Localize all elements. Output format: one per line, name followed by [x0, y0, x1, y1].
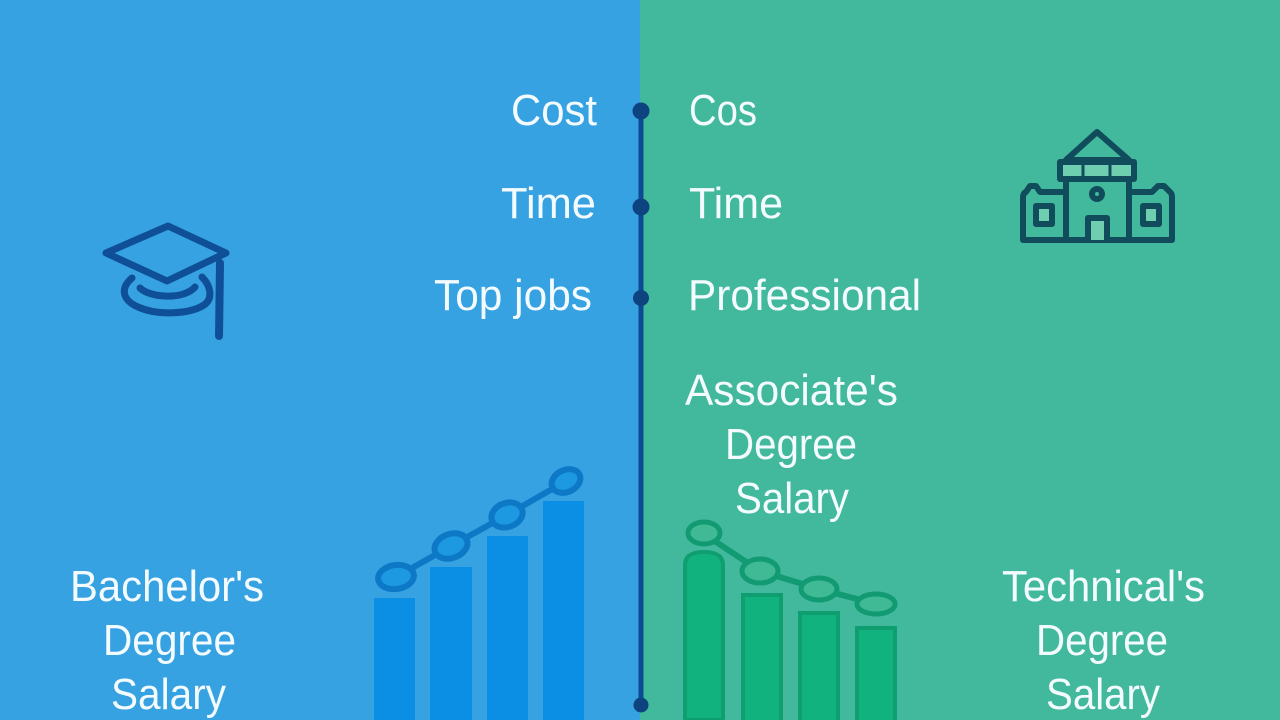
- labels: associate's comparison rows: [688, 86, 921, 320]
- icon: graduation cap: [106, 226, 226, 336]
- heading: technical's degree salary: Salary: [1046, 670, 1160, 719]
- icon: school building: [1023, 132, 1172, 240]
- heading: associate's degree salary: [685, 366, 898, 523]
- heading: associate's degree salary: Salary: [735, 474, 849, 523]
- chart: rising bachelor's salary bars: [374, 465, 584, 720]
- labels: associate's comparison rows: Professional: [688, 271, 921, 320]
- labels: bachelor's comparison rows: [434, 86, 597, 320]
- panel: bachelor's degree background: [0, 0, 640, 720]
- labels: associate's comparison rows: Time: [689, 179, 783, 228]
- heading: bachelor's degree salary: [70, 562, 264, 719]
- heading: bachelor's degree salary: Salary: [111, 670, 226, 719]
- heading: technical's degree salary: [1002, 562, 1205, 719]
- labels: bachelor's comparison rows: Time: [501, 179, 596, 228]
- chart: falling associate's salary bars: [685, 522, 895, 720]
- heading: associate's degree salary: Associate's: [685, 366, 898, 415]
- heading: technical's degree salary: Technical's: [1002, 562, 1205, 611]
- heading: bachelor's degree salary: Bachelor's: [70, 562, 264, 611]
- timeline: central divider with dots: [632, 102, 650, 712]
- labels: associate's comparison rows: Cos: [689, 86, 757, 135]
- heading: technical's degree salary: Degree: [1036, 616, 1168, 665]
- heading: associate's degree salary: Degree: [725, 420, 857, 469]
- heading: bachelor's degree salary: Degree: [103, 616, 236, 665]
- labels: bachelor's comparison rows: Cost: [511, 86, 597, 135]
- labels: bachelor's comparison rows: Top jobs: [434, 271, 592, 320]
- panel: associate's degree background: [640, 0, 1280, 720]
